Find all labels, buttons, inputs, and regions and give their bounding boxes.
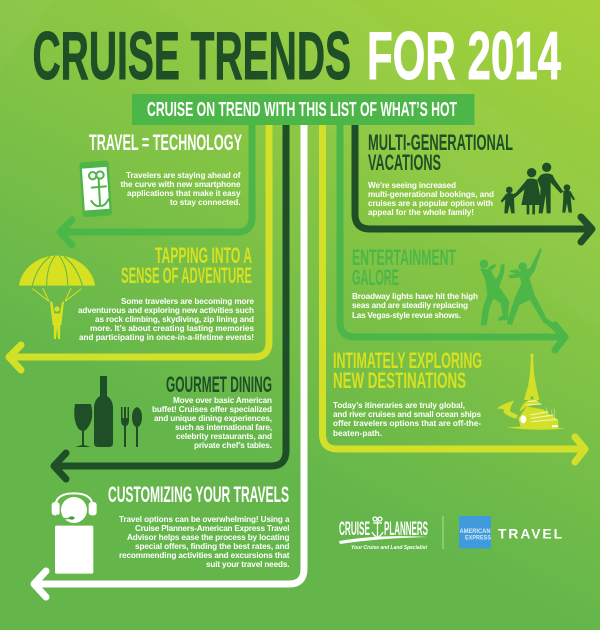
- panel: multi-generational vacations: [368, 130, 575, 217]
- panel: customizing your travels: [52, 482, 290, 574]
- icon: family: [501, 163, 575, 214]
- body text: special offers, finding the best rates, and: [135, 542, 290, 551]
- body text: Some travelers are becoming more: [121, 297, 254, 306]
- icon: dancers: [480, 247, 562, 335]
- logo: American Express Travel: AMERICAN: [460, 529, 490, 535]
- heading: TRAVEL = TECHNOLOGY: [89, 130, 242, 155]
- heading: [368, 130, 513, 175]
- logo: Cruise Planners: [339, 517, 428, 551]
- heading: INTIMATELY EXPLORING: [333, 348, 482, 373]
- body text: [78, 297, 254, 342]
- logo: American Express Travel: [459, 516, 562, 548]
- body text: appeal for the whole family!: [368, 208, 474, 217]
- logo: Cruise Planners: Your Cruise and Land Specialist: [351, 545, 428, 551]
- body text: We’re seeing increased: [368, 181, 456, 190]
- heading: CUSTOMIZING YOUR TRAVELS: [108, 482, 289, 507]
- heading: VACATIONS: [368, 150, 441, 175]
- route line: adventure (yellow): [9, 120, 269, 370]
- route line: entertainment (green): [340, 120, 565, 350]
- body text: [152, 396, 272, 450]
- heading: GALORE: [352, 265, 399, 290]
- heading: [333, 348, 482, 393]
- body text: such as international fare,: [175, 423, 272, 432]
- heading: NEW DESTINATIONS: [333, 368, 466, 393]
- body text: to stay connected.: [170, 198, 240, 207]
- heading: [352, 245, 456, 290]
- body text: [333, 401, 481, 438]
- icon: smartphone with anchor: [79, 160, 112, 217]
- route line: multi-generational (dark green): [355, 120, 592, 242]
- heading: GOURMET DINING: [166, 372, 272, 397]
- icon: parachute: [19, 256, 95, 339]
- body text: as rock climbing, skydiving, zip lining and: [95, 315, 254, 324]
- body text: more. It’s about creating lasting memories: [90, 324, 254, 333]
- body text: Travel options can be overwhelming! Using a: [119, 515, 290, 524]
- body text: cruises are a popular option with: [368, 199, 493, 208]
- heading: TAPPING INTO A: [155, 243, 252, 268]
- icon: eiffel tower and cruise ship: [497, 354, 567, 430]
- body text: the curve with new smartphone: [120, 180, 241, 189]
- body text: private chef’s tables.: [194, 441, 272, 450]
- heading: ENTERTAINMENT: [352, 245, 456, 270]
- body text: [120, 171, 241, 207]
- body text: celebrity restaurants, and: [176, 432, 272, 441]
- body text: Today’s itineraries are truly global,: [333, 401, 465, 410]
- divider: [442, 516, 444, 549]
- body text: adventurous and exploring new activities such: [78, 306, 254, 315]
- logo: Cruise Planners: CRUISE: [339, 519, 370, 540]
- logo: American Express Travel: TRAVEL: [498, 526, 562, 542]
- body text: Travelers are staying ahead of: [126, 171, 241, 180]
- heading: [121, 243, 252, 288]
- body text: and participating in once-in-a-lifetime events!: [79, 333, 254, 342]
- body text: Cruise Planners-American Express Travel: [135, 524, 290, 533]
- title: CRUISE TRENDS: [32, 19, 351, 94]
- icon: travel advisor with headset: [52, 493, 97, 574]
- body text: recommending activities and excursions that: [119, 551, 290, 560]
- logo: American Express Travel: EXPRESS: [465, 536, 491, 542]
- panel: gourmet dining: [74, 372, 272, 450]
- body text: Advisor helps ease the process by locating: [127, 533, 290, 542]
- body text: seas and are steadily replacing: [352, 301, 468, 310]
- route line: gourmet dining (dark green): [54, 120, 286, 479]
- panel: entertainment galore: [352, 245, 562, 335]
- body text: and river cruises and small ocean ships: [333, 410, 481, 419]
- body text: beaten-path.: [333, 429, 382, 438]
- panel: intimately exploring new destinations: [333, 348, 567, 438]
- panel: tapping into a sense of adventure: [19, 243, 254, 342]
- icon: anchor: [372, 517, 383, 537]
- body text: Move over basic American: [173, 396, 272, 405]
- body text: applications that make it easy: [127, 189, 241, 198]
- heading: SENSE OF ADVENTURE: [121, 263, 252, 288]
- body text: suit your travel needs.: [206, 560, 290, 569]
- route line: customizing (white): [34, 120, 304, 597]
- text: PLANNERS: [384, 519, 428, 540]
- icon: wine bottle, glass and cutlery: [74, 376, 142, 447]
- body text: offer travelers options that are off-the-: [333, 419, 481, 428]
- body text: multi-generational bookings, and: [368, 190, 494, 199]
- route line: destinations (yellow): [322, 120, 585, 462]
- body text: Las Vegas-style revue shows.: [352, 311, 461, 320]
- body text: Broadway lights have hit the high: [352, 292, 478, 301]
- body text: and unique dining experiences,: [154, 414, 272, 423]
- body text: buffet! Cruises offer specialized: [152, 405, 272, 414]
- panel: travel = technology: [79, 130, 242, 217]
- body text: [119, 515, 290, 569]
- body text: [368, 181, 494, 217]
- body text: [352, 292, 478, 320]
- banner: [132, 94, 474, 125]
- route line: technology (green): [60, 120, 252, 245]
